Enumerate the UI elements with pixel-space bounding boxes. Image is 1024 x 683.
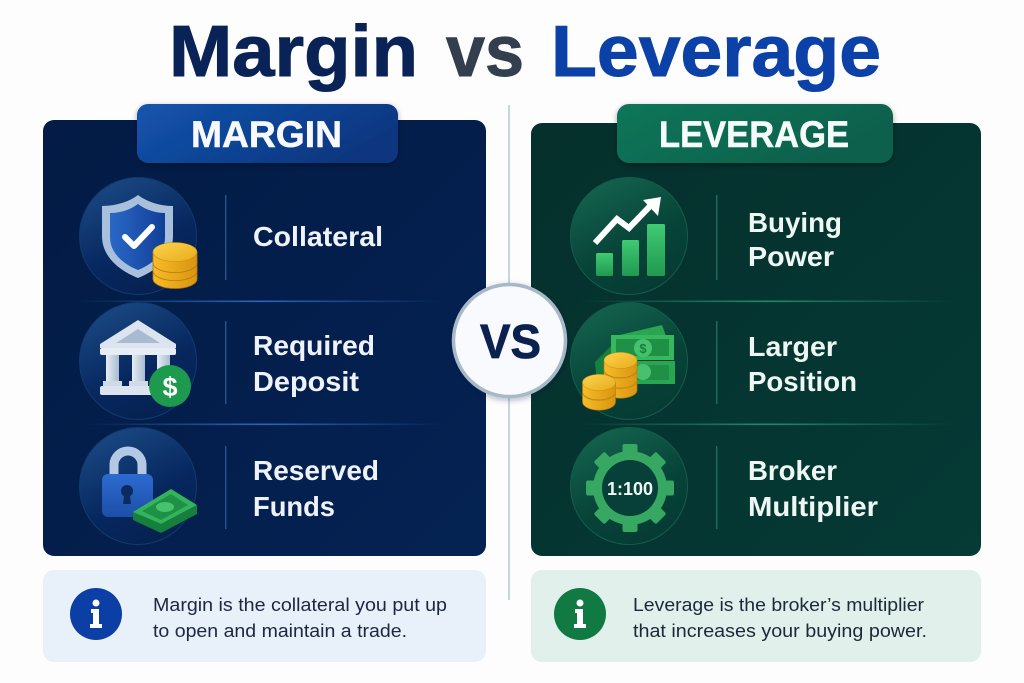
icon: padlock with cash — [80, 428, 197, 544]
title: vs — [446, 12, 524, 92]
label: larger position: Position — [748, 366, 857, 397]
panel: margin — [43, 104, 486, 556]
label: larger position: Larger — [748, 331, 837, 362]
text: leverage definition: Leverage is the broker’s multiplier — [633, 595, 924, 615]
label: required deposit — [253, 330, 375, 397]
icon: info blue — [70, 588, 122, 640]
text: leverage definition — [633, 595, 927, 641]
icon: gear 1:100: 1:100 — [607, 479, 653, 499]
callout: margin definition — [43, 570, 486, 662]
title: Leverage — [551, 12, 881, 92]
icon: bank with dollar: $ — [162, 372, 178, 402]
VS badge — [454, 284, 566, 396]
leverage heading tab: LEVERAGE — [659, 114, 849, 155]
title — [169, 12, 881, 92]
label: reserved funds — [253, 455, 379, 522]
text: margin definition: Margin is the collateral you put up — [153, 595, 447, 615]
label: reserved funds: Reserved — [253, 455, 379, 486]
title: Margin — [169, 12, 418, 92]
label: broker multiplier: Broker — [748, 455, 837, 486]
label: required deposit: Required — [253, 330, 375, 361]
margin heading tab — [137, 104, 398, 163]
margin heading tab: MARGIN — [191, 114, 342, 155]
label: broker multiplier: Multiplier — [748, 491, 878, 522]
label: buying power: Buying — [748, 207, 842, 238]
icon: gear 1:100 — [570, 428, 688, 544]
label: required deposit: Deposit — [253, 366, 359, 397]
callout: leverage definition — [531, 570, 981, 662]
label: broker multiplier — [748, 455, 878, 522]
label: buying power — [748, 207, 842, 272]
icon: cash and coins — [570, 302, 688, 420]
label: collateral: Collateral — [253, 221, 383, 252]
label: buying power: Power — [748, 241, 834, 272]
icon: rising chart — [570, 178, 688, 294]
text: margin definition — [153, 595, 447, 641]
icon: info green — [554, 588, 606, 640]
icon: cash and coins: $ — [639, 341, 647, 356]
panel: leverage — [531, 104, 981, 556]
text: leverage definition: that increases your buying power. — [633, 621, 927, 641]
label: larger position — [748, 331, 857, 397]
leverage heading tab — [617, 104, 893, 163]
label: reserved funds: Funds — [253, 491, 335, 522]
text: margin definition: to open and maintain a trade. — [153, 621, 407, 641]
icon: shield with coins — [80, 178, 197, 294]
VS badge: VS — [480, 316, 541, 369]
icon: bank with dollar — [80, 302, 196, 420]
